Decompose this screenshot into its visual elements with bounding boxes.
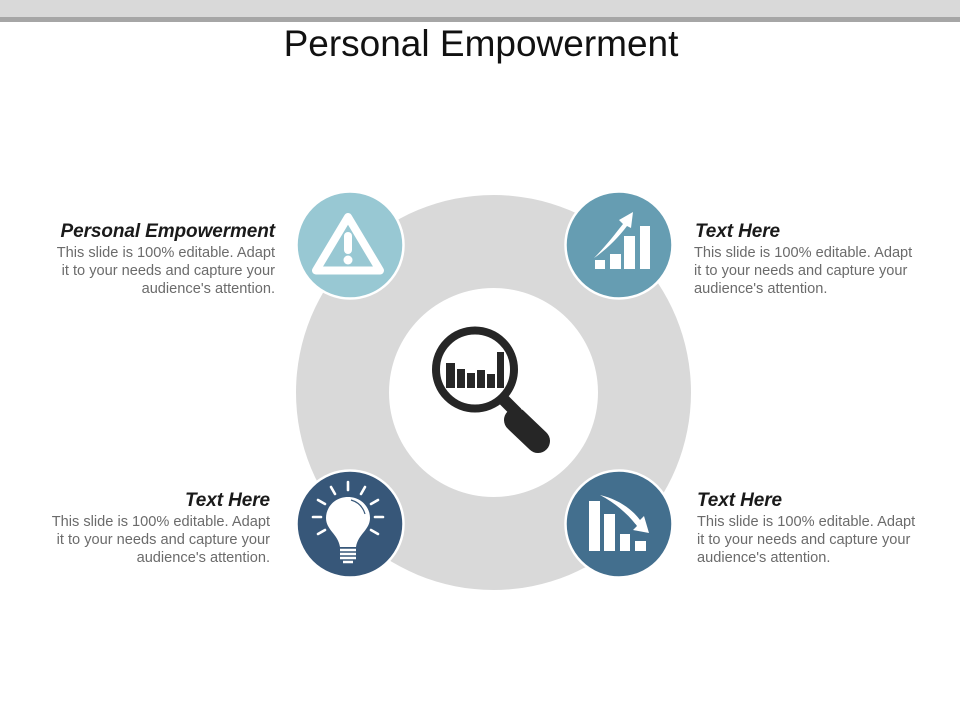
text block: bottom left: audience's attention. [137,550,270,566]
text block: top left [57,221,276,297]
icon: magnifier with bars [436,330,538,441]
text block: top right: Text Here [695,221,780,242]
text block: bottom left [52,490,270,566]
icon: warning circle [296,192,404,298]
text block: bottom left: Text Here [185,490,270,511]
text block: top right: audience's attention. [694,281,827,297]
text block: top right: it to your needs and capture your [694,263,907,279]
icon: rising chart circle [566,192,672,298]
text block: bottom right: audience's attention. [697,550,830,566]
text block: top left: Personal Empowerment [61,221,275,242]
grey ring [296,195,691,590]
text block: top left: audience's attention. [142,281,275,297]
text block: bottom right [697,490,916,566]
text block: bottom right: This slide is 100% editable. Adapt [697,514,915,530]
header band [0,0,960,22]
text block: top left: it to your needs and capture your [62,263,275,279]
text block: bottom right: Text Here [697,490,782,511]
text block: bottom left: it to your needs and capture your [57,532,270,548]
text block: bottom left: This slide is 100% editable. Adapt [52,514,270,530]
icon: lightbulb circle [296,470,404,578]
title: Personal Empowerment [284,23,678,64]
text block: bottom right: it to your needs and capture your [697,532,910,548]
icon: falling chart circle [566,470,672,578]
text block: top right [694,221,912,297]
text block: top right: This slide is 100% editable. Adapt [694,245,912,261]
text block: top left: This slide is 100% editable. Adapt [57,245,275,261]
